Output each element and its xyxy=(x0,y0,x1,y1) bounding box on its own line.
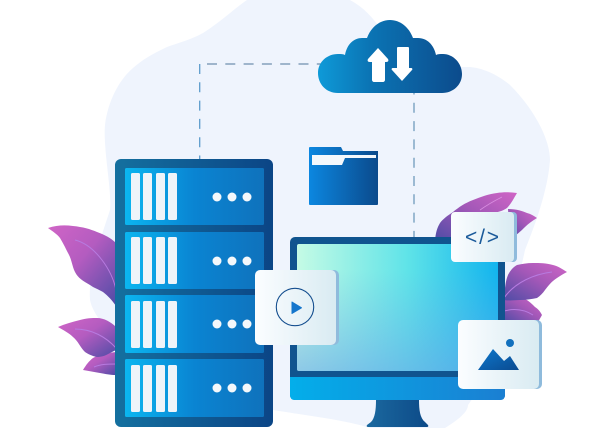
dashed connector lines xyxy=(200,64,414,238)
leaf: mid right small xyxy=(504,297,542,322)
leaf: middle left xyxy=(58,318,116,357)
server unit 2 xyxy=(125,232,264,289)
icon: down arrow xyxy=(392,47,412,81)
leaf: lower left xyxy=(83,352,116,375)
leaf: upper right small xyxy=(508,209,537,240)
icon: code brackets: </> xyxy=(465,226,499,249)
leaf: large left xyxy=(48,225,116,306)
card: video player xyxy=(255,270,339,345)
leaf: mid right large xyxy=(504,263,567,300)
icon: up arrow xyxy=(368,48,388,82)
monitor screen xyxy=(297,244,498,371)
icon: mountain picture xyxy=(478,339,519,370)
leaf: upper right large xyxy=(435,192,517,240)
icon: folder xyxy=(309,147,378,205)
monitor chin xyxy=(290,377,505,400)
server unit 1 xyxy=(125,168,264,225)
left leaves xyxy=(48,225,116,375)
monitor xyxy=(290,237,505,427)
server unit 3 xyxy=(125,295,264,353)
server unit 4 xyxy=(125,359,264,417)
server rack xyxy=(115,159,273,427)
card: image xyxy=(458,320,542,389)
background blob xyxy=(90,0,550,428)
icon: cloud with up and down arrows xyxy=(318,20,462,93)
icon: play button xyxy=(276,288,314,326)
right leaves xyxy=(435,192,567,322)
card: code xyxy=(451,212,517,262)
monitor stand xyxy=(367,400,428,427)
monitor frame xyxy=(290,237,505,400)
